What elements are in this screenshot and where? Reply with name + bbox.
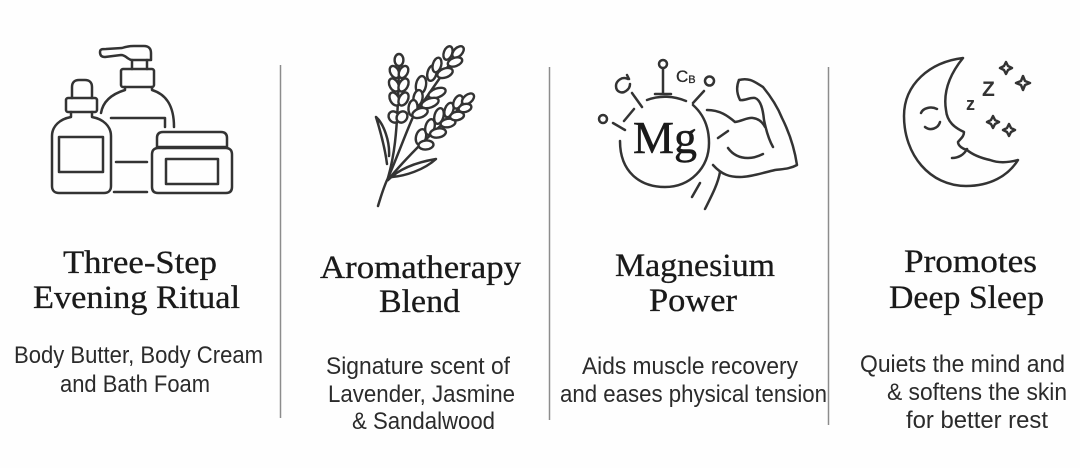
panel: promotes deep sleep <box>860 58 1067 434</box>
label: CB: C <box>676 67 688 86</box>
panel: magnesium power <box>560 60 827 408</box>
label: CB: B <box>688 74 696 86</box>
text: products: and Bath Foam <box>60 371 210 398</box>
label: Mg: Mg <box>633 112 697 163</box>
label: Zzz: Z <box>982 78 995 101</box>
heading: promotes deep sleep: Promotes <box>904 244 1037 280</box>
text: signature scent: Signature scent of <box>326 353 510 380</box>
panel: three-step evening ritual <box>14 46 263 398</box>
text: signature scent: & Sandalwood <box>352 408 495 435</box>
heading: promotes deep sleep: Deep Sleep <box>889 280 1044 316</box>
heading: magnesium power <box>615 248 775 319</box>
heading: three-step evening ritual <box>33 245 240 316</box>
heading: aromatherapy blend: Blend <box>379 284 461 320</box>
label: Zzz: z <box>966 94 975 114</box>
text: muscle recovery: Aids muscle recovery <box>582 353 798 380</box>
text: quiets the mind: & softens the skin <box>887 379 1067 406</box>
text: signature scent <box>326 353 515 435</box>
text: products <box>14 342 263 398</box>
panel: aromatherapy blend <box>320 44 522 435</box>
text: signature scent: Lavender, Jasmine <box>328 381 515 408</box>
heading: aromatherapy blend <box>320 250 522 320</box>
icon: lavender sprigs <box>376 44 476 206</box>
text: quiets the mind: for better rest <box>906 407 1048 434</box>
text: muscle recovery <box>560 353 827 408</box>
text: quiets the mind: Quiets the mind and <box>860 351 1065 378</box>
icon: magnesium and flexed arm <box>599 60 797 209</box>
label: Zzz <box>966 78 995 114</box>
heading: three-step evening ritual: Three-Step <box>63 245 217 281</box>
heading: magnesium power: Magnesium <box>615 248 775 284</box>
text: products: Body Butter, Body Cream <box>14 342 263 369</box>
text: muscle recovery: and eases physical tension <box>560 381 827 408</box>
heading: aromatherapy blend: Aromatherapy <box>320 250 522 286</box>
heading: promotes deep sleep <box>889 244 1044 316</box>
icon: sleeping moon <box>904 58 1030 186</box>
heading: magnesium power: Power <box>649 283 737 319</box>
icon: bottles and jar <box>52 46 232 193</box>
text: quiets the mind <box>860 351 1067 434</box>
heading: three-step evening ritual: Evening Ritual <box>33 280 240 316</box>
